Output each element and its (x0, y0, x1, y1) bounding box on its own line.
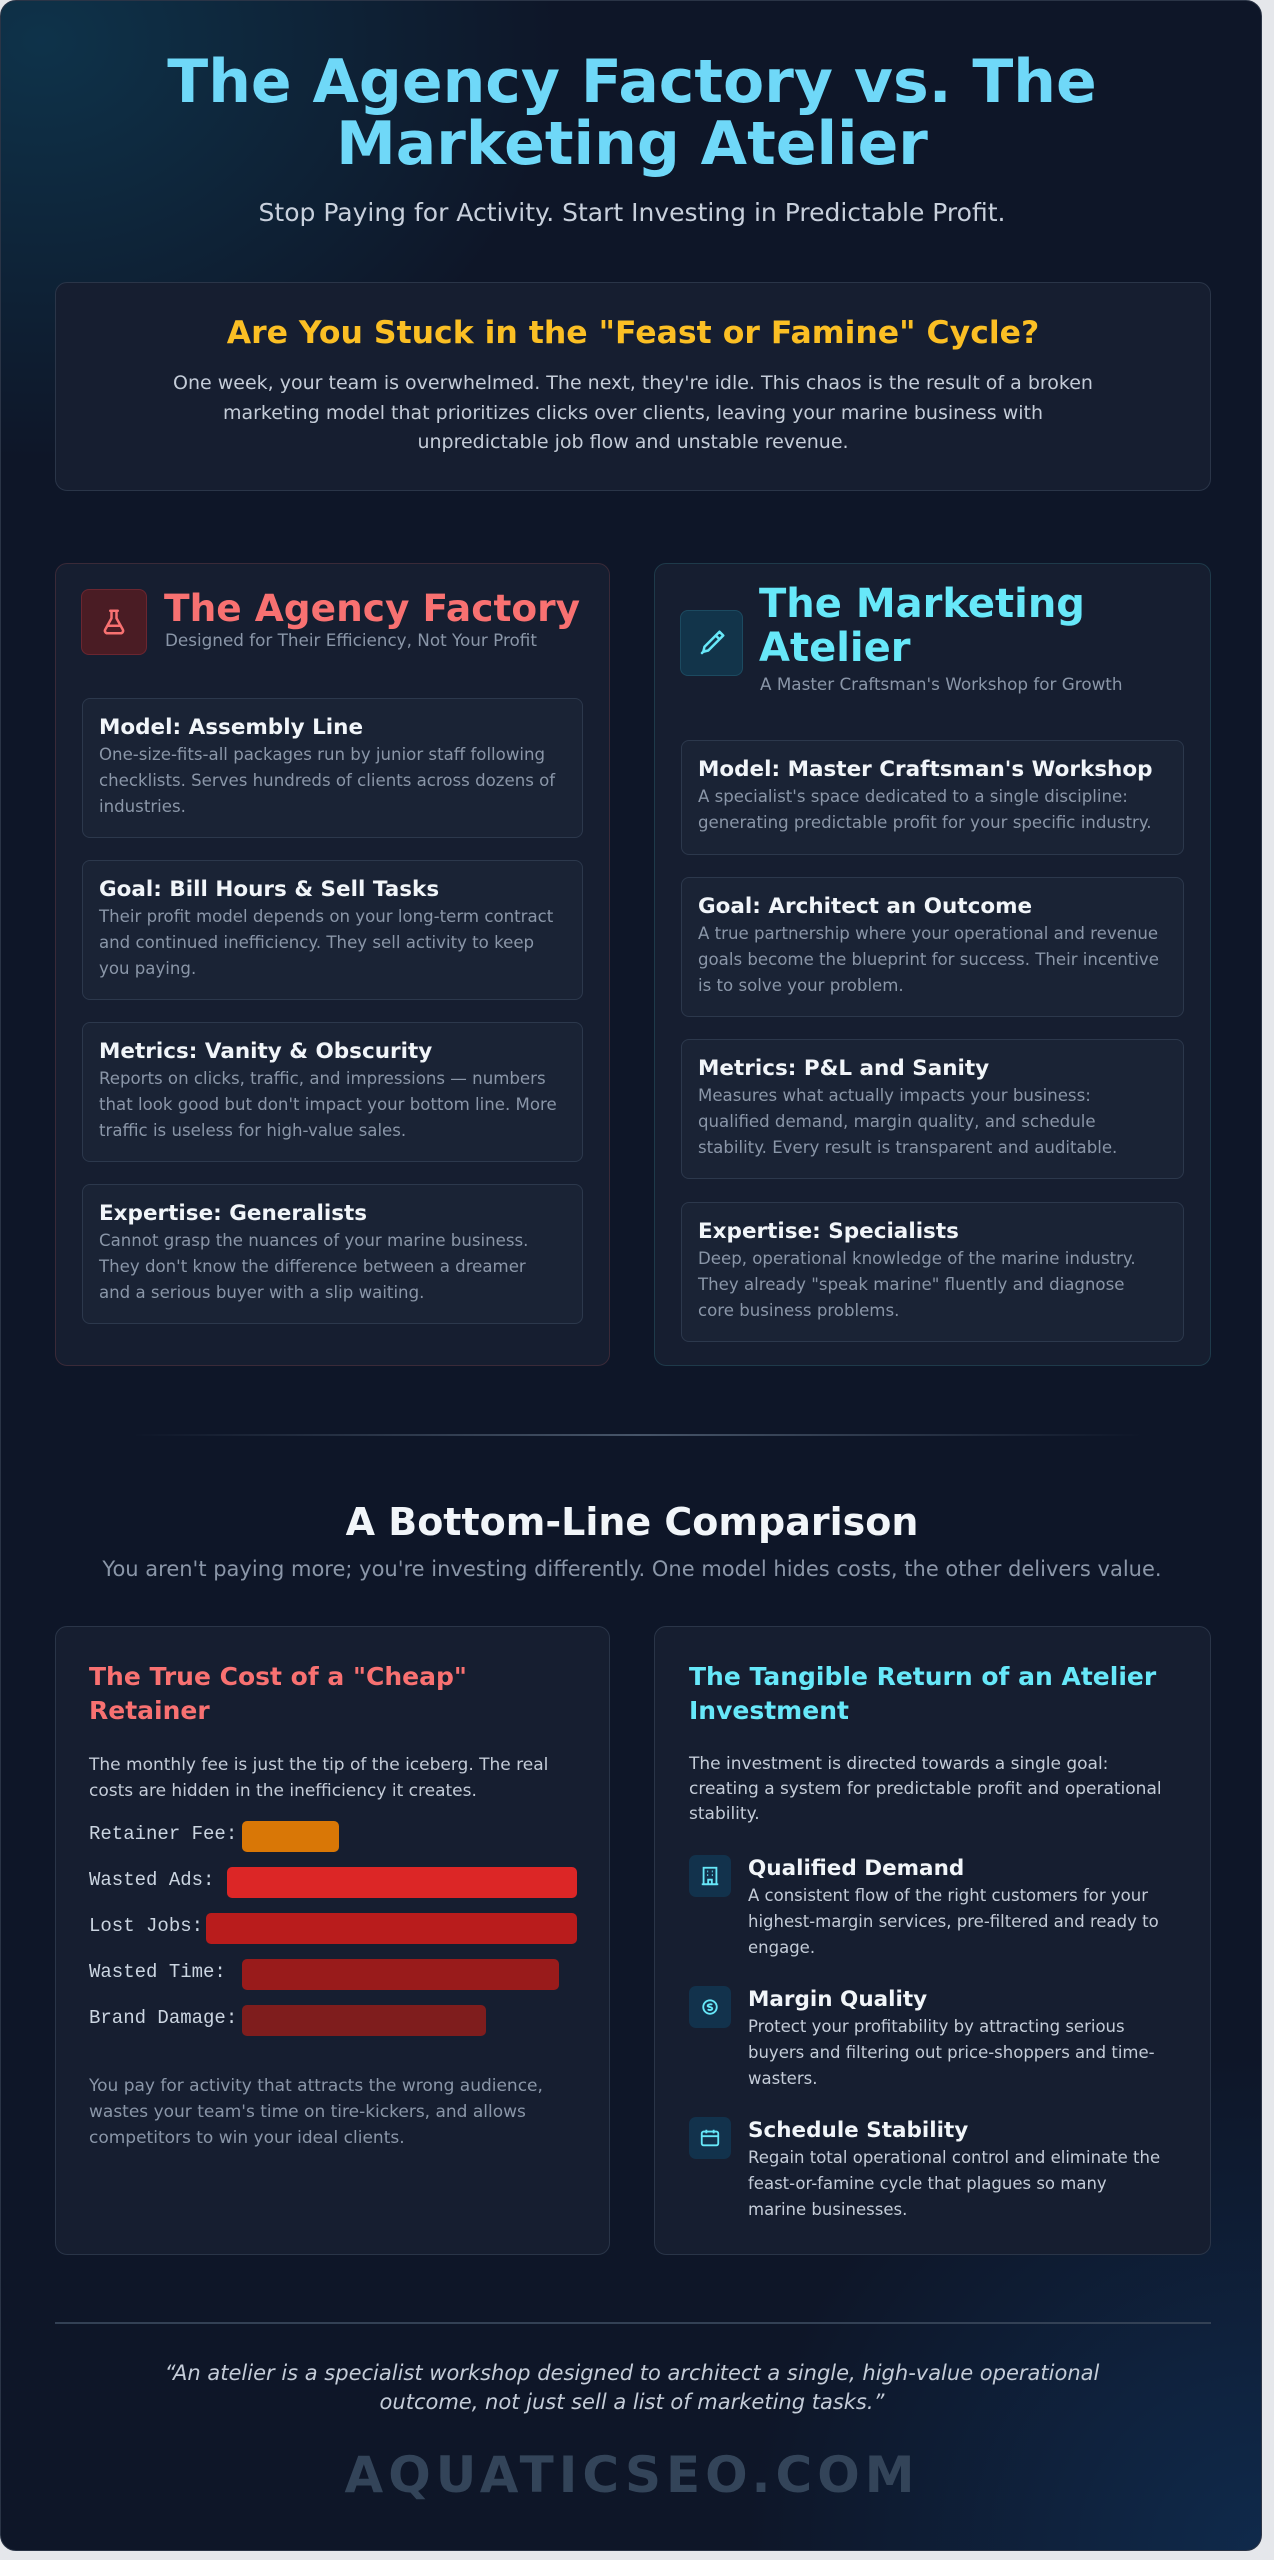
subheading: agency: Designed for Their Efficiency, Not Your Profit (165, 630, 537, 650)
brand: aquaticseo.com: AQUATICSEO.COM (345, 2446, 919, 2504)
card: model workshop: Model: Master Craftsman's Workshop (698, 757, 1153, 782)
card: metrics p&l: Measures what actually impacts your business: qualified demand, margin quality, and schedule stability. Every result is transparent and auditable. (698, 1086, 1117, 1157)
panel: agency factory (55, 563, 610, 1366)
bar chart: hidden costs: Lost Jobs: (89, 1915, 203, 1937)
card: expertise specialists (681, 1202, 1184, 1342)
title (167, 47, 1097, 179)
card: expertise generalists: Cannot grasp the nuances of your marine business. They don't know the difference between a dreamer (99, 1231, 528, 1276)
card: metrics vanity (82, 1022, 583, 1162)
card: model assembly line (82, 698, 583, 838)
card: expertise generalists: Expertise: Generalists (99, 1201, 367, 1226)
panel: true cost (55, 1626, 610, 2255)
item: qualified demand (689, 1855, 1159, 1957)
card: goal bill hours: Their profit model depends on your long-term contract and continued inefficiency. They sell activity to keep you paying. (99, 907, 553, 978)
subtitle: comparison: You aren't paying more; you're investing differently. One model hides costs, the other delivers value. (102, 1557, 1162, 1581)
card: model workshop (681, 740, 1184, 855)
icon: flask (81, 589, 147, 655)
bar chart: hidden costs: Wasted Ads: (89, 1869, 214, 1891)
card: goal bill hours: Goal: Bill Hours & Sell Tasks (99, 877, 439, 902)
card: expertise generalists: and a serious buyer with a slip waiting. (99, 1283, 424, 1302)
bar chart: hidden costs: Retainer Fee: (89, 1823, 237, 1845)
panel: feast or famine (55, 282, 1211, 491)
title: The Agency Factory vs. The (167, 47, 1097, 117)
icon: calendar (689, 2117, 731, 2159)
subheading: atelier: A Master Craftsman's Workshop for Growth (760, 674, 1123, 694)
title: Marketing Atelier (336, 109, 928, 179)
card: metrics p&l: Metrics: P&L and Sanity (698, 1056, 989, 1081)
item: schedule stability: Regain total operational control and eliminate the feast-or-famine cycle that plagues so many marine businesses. (748, 2148, 1160, 2219)
icon: pen (680, 610, 743, 676)
item: margin quality: Protect your profitability by attracting serious buyers and filtering out price-shoppers and time-wasters. (748, 2017, 1155, 2088)
heading: feast or famine: Are You Stuck in the "Feast or Famine" Cycle? (227, 315, 1039, 351)
item: margin quality (689, 1986, 1155, 2088)
card: metrics vanity: Reports on clicks, traffic, and impressions — numbers that look good but don't impact your bottom line. More traffic is useless for high-value sales. (99, 1069, 557, 1140)
heading: marketing atelier: The Marketing (759, 581, 1085, 627)
item: schedule stability (689, 2117, 1160, 2219)
item: qualified demand: A consistent flow of the right customers for your highest-margin services, pre-filtered and ready to engage. (748, 1886, 1159, 1957)
card: model assembly line: Model: Assembly Line (99, 715, 363, 740)
heading: tangible return: The Tangible Return of an Atelier Investment (689, 1662, 1156, 1725)
card: model workshop: A specialist's space dedicated to a single discipline: generating predictable profit for your specific industry. (698, 787, 1152, 832)
subtitle: Stop Paying for Activity. Start Investing in Predictable Profit. (259, 198, 1005, 227)
bar chart: hidden costs (89, 1821, 577, 2036)
card: goal architect: A true partnership where your operational and revenue goals become the blueprint for success. Their incentive is to solve your problem. (698, 924, 1159, 995)
bar chart: hidden costs: Brand Damage: (89, 2007, 237, 2029)
card: model assembly line: One-size-fits-all packages run by junior staff following checklists. Serves hundreds of clients across dozens of industries. (99, 745, 555, 816)
card: goal architect: Goal: Architect an Outcome (698, 894, 1032, 919)
heading: agency factory: The Agency Factory (164, 586, 580, 630)
text: investment goal: The investment is directed towards a single goal: creating a system for predictable profit and operational stability. (689, 1754, 1162, 1824)
text: iceberg: The monthly fee is just the tip of the iceberg. The real costs are hidden in the inefficiency it creates. (89, 1755, 548, 1801)
icon: building (689, 1855, 731, 1897)
quote: “An atelier is a specialist workshop designed to architect a single, high-value operational outcome, not just sell a list of marketing tasks.” (165, 2361, 1099, 2414)
item: qualified demand: Qualified Demand (748, 1856, 964, 1881)
heading: true cost: The True Cost of a "Cheap" Retainer (89, 1662, 467, 1725)
item: margin quality: Margin Quality (748, 1987, 927, 2012)
card: expertise specialists: Expertise: Specialists (698, 1219, 959, 1244)
heading: marketing atelier (759, 581, 1085, 671)
panel: tangible return (654, 1626, 1211, 2255)
text: wrong audience: You pay for activity that attracts the wrong audience, wastes your team's time on tire-kickers, and allows competitors to win your ideal clients. (89, 2076, 543, 2148)
panel: marketing atelier (654, 563, 1211, 1366)
card: expertise generalists (82, 1184, 583, 1324)
text: feast intro: One week, your team is overwhelmed. The next, they're idle. This chaos is the result of a broken marketing model that prioritizes clicks over clients, leaving your marine business with unpredictable job flow and unstable revenue. (173, 372, 1093, 453)
item: schedule stability: Schedule Stability (748, 2118, 968, 2143)
card: goal bill hours (82, 860, 583, 1000)
bar chart: hidden costs: Wasted Time: (89, 1961, 226, 1983)
card: expertise specialists: core business problems. (698, 1301, 899, 1320)
card: metrics vanity: Metrics: Vanity & Obscurity (99, 1039, 432, 1064)
heading: marketing atelier: Atelier (759, 625, 910, 671)
heading: bottom-line comparison: A Bottom-Line Comparison (346, 1500, 918, 1544)
card: expertise specialists: Deep, operational knowledge of the marine industry. They already "speak marine" fluently and diagnose (698, 1249, 1136, 1294)
card: metrics p&l (681, 1039, 1184, 1179)
card: goal architect (681, 877, 1184, 1017)
icon: coin (689, 1986, 731, 2028)
